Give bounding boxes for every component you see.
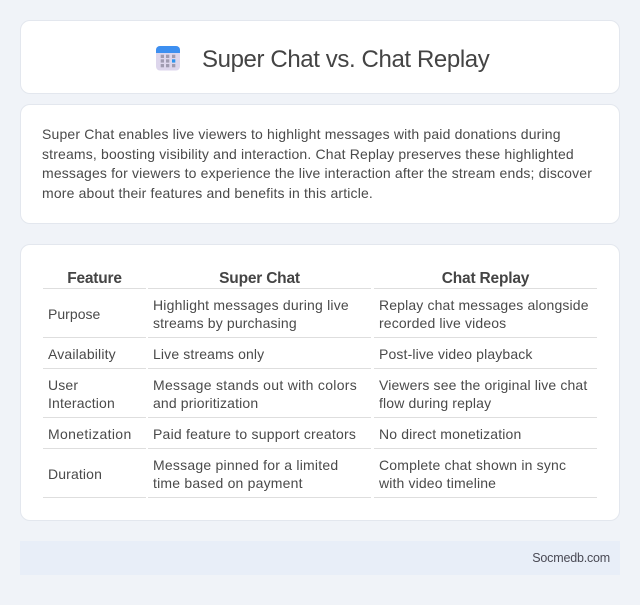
row: duration: time based on payment bbox=[153, 475, 303, 491]
row: purpose: recorded live videos bbox=[379, 315, 506, 331]
intro text bbox=[42, 126, 592, 200]
table header: Super Chat bbox=[219, 270, 300, 287]
row: availability: Post-live video playback bbox=[379, 346, 533, 362]
table header: Chat Replay bbox=[442, 270, 529, 287]
intro text: messages for viewers to experience the live interaction after the stream ends; discover bbox=[42, 165, 592, 181]
row: purpose: Highlight messages during live bbox=[153, 297, 349, 313]
row: monetization: Paid feature to support creators bbox=[153, 426, 356, 442]
row: user interaction: flow during replay bbox=[379, 395, 491, 411]
row: user interaction bbox=[48, 377, 588, 411]
row: duration: Duration bbox=[48, 466, 102, 482]
comparison table bbox=[43, 270, 597, 498]
row: user interaction: and prioritization bbox=[153, 395, 258, 411]
footer source text: Socmedb.com bbox=[532, 551, 610, 565]
row: user interaction: User bbox=[48, 377, 78, 393]
table header: Feature bbox=[67, 270, 122, 287]
row: monetization: No direct monetization bbox=[379, 426, 521, 442]
row: user interaction: Message stands out with colors bbox=[153, 377, 357, 393]
row: monetization bbox=[48, 426, 521, 442]
icon: calendar bbox=[156, 46, 180, 70]
row: duration: Message pinned for a limited bbox=[153, 457, 338, 473]
intro text: more about their features and benefits in this article. bbox=[42, 184, 373, 200]
title panel bbox=[20, 20, 620, 94]
row: duration: with video timeline bbox=[379, 475, 496, 491]
row: purpose bbox=[48, 297, 589, 331]
intro panel bbox=[20, 104, 620, 224]
row: availability: Live streams only bbox=[153, 346, 264, 362]
row: purpose: streams by purchasing bbox=[153, 315, 297, 331]
title: Super Chat vs. Chat Replay bbox=[202, 46, 489, 73]
comparison table panel bbox=[20, 244, 620, 521]
row: user interaction: Interaction bbox=[48, 395, 115, 411]
row: user interaction: Viewers see the original live chat bbox=[379, 377, 587, 393]
row: purpose: Replay chat messages alongside bbox=[379, 297, 589, 313]
row: purpose: Purpose bbox=[48, 306, 100, 322]
row: duration bbox=[48, 457, 566, 491]
table header bbox=[67, 270, 530, 287]
row: availability bbox=[48, 346, 533, 362]
row: duration: Complete chat shown in sync bbox=[379, 457, 566, 473]
intro text: Super Chat enables live viewers to highlight messages with paid donations during bbox=[42, 126, 561, 142]
row: monetization: Monetization bbox=[48, 426, 132, 442]
intro text: streams, boosting visibility and interaction. Chat Replay preserves these highlighted bbox=[42, 146, 574, 162]
footer bar bbox=[20, 541, 620, 575]
row: availability: Availability bbox=[48, 346, 116, 362]
